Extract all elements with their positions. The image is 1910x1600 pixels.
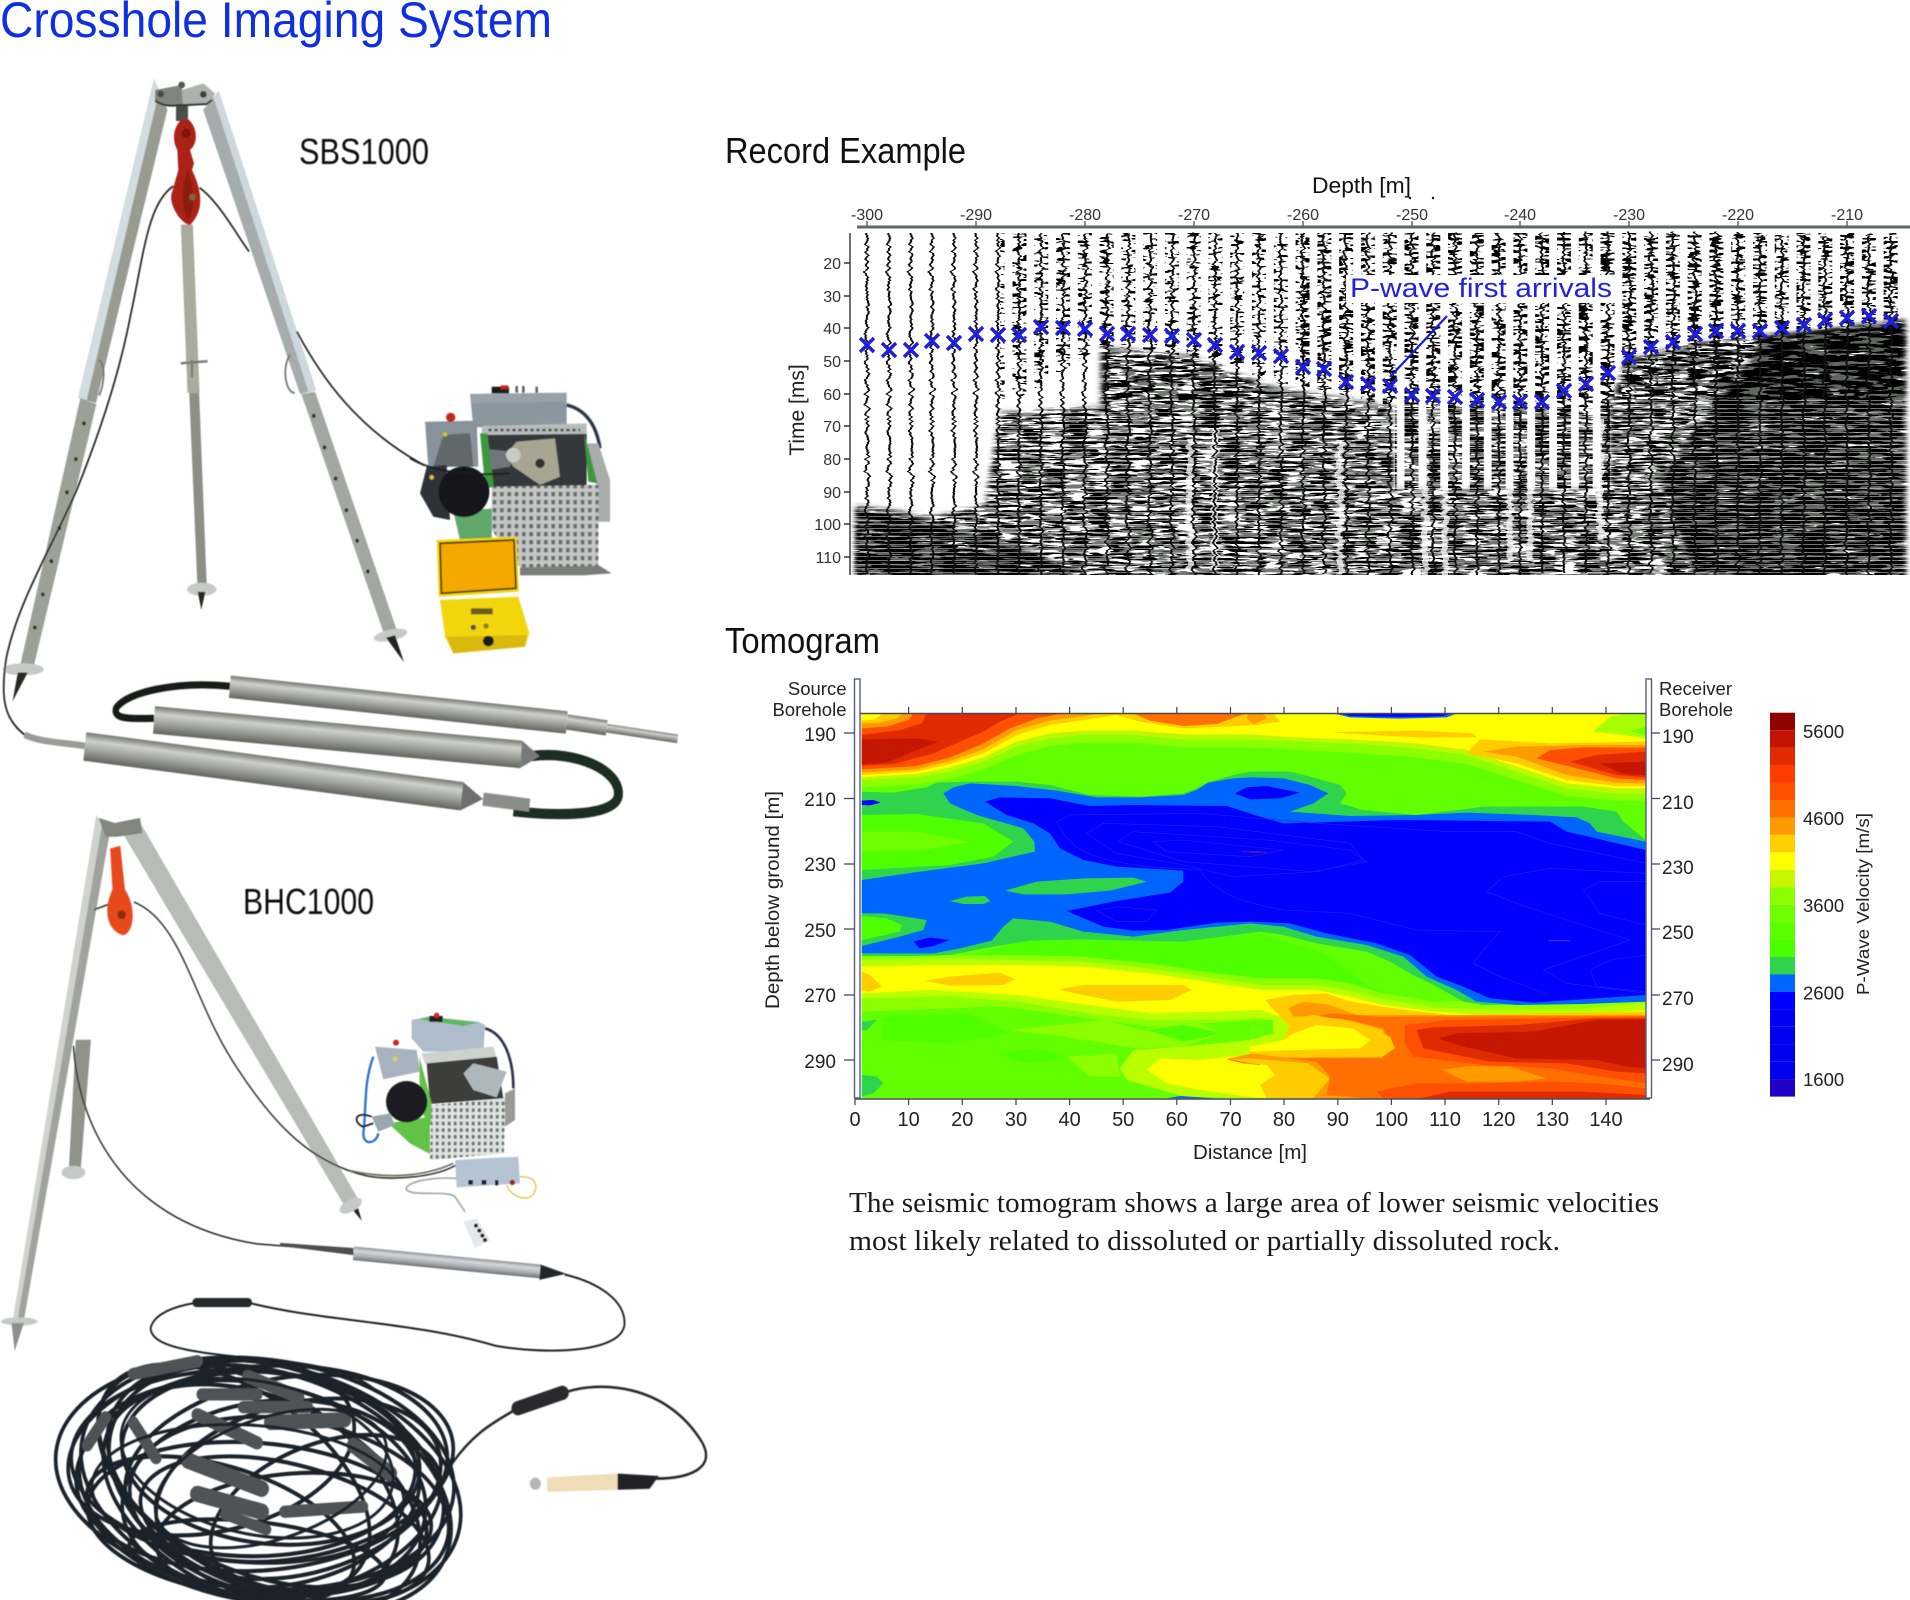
- chart: tomogram: [762, 678, 1873, 1164]
- right depth labels: 190: [1662, 727, 1694, 748]
- label: receiver borehole: Borehole: [1659, 699, 1733, 720]
- contour field: [862, 713, 1646, 1098]
- distance labels: 10: [897, 1109, 920, 1131]
- colour legend: [1770, 713, 1795, 1097]
- heading: Tomogram: Tomogram: [725, 620, 880, 661]
- time labels: 60: [823, 387, 841, 404]
- label: receiver borehole: [1659, 678, 1733, 720]
- legend values: 5600: [1803, 721, 1844, 742]
- lower warm layers: [862, 934, 1386, 994]
- chart: seismic record section: [786, 173, 1910, 575]
- label: BHC1000: BHC1000: [243, 881, 374, 922]
- distance labels: 80: [1273, 1109, 1295, 1131]
- distance labels: 130: [1536, 1109, 1569, 1131]
- distance labels: 0: [849, 1109, 861, 1131]
- right depth labels: 230: [1662, 858, 1694, 879]
- icon: SBS1000 winch: [410, 385, 612, 653]
- right depth labels: 210: [1662, 793, 1694, 814]
- time labels: 50: [823, 354, 841, 371]
- noise: dense wedges: [851, 318, 1910, 575]
- depth labels: -290: [960, 207, 992, 224]
- panel: SBS1000 equipment: [3, 79, 678, 819]
- depth labels: -210: [1831, 207, 1863, 224]
- heading: Record Example: Record Example: [725, 130, 966, 171]
- depth labels: -220: [1722, 207, 1754, 224]
- lower right hot layers: [1227, 993, 1646, 1098]
- top axis: [857, 221, 1910, 227]
- label: source borehole: Borehole: [772, 699, 846, 720]
- blue layer: [862, 777, 1646, 1005]
- plot frame and boreholes: [844, 679, 1660, 1105]
- icon: borehole source tubes: [25, 676, 678, 819]
- legend values: 1600: [1803, 1069, 1844, 1090]
- callout: P-wave first arrivals: [1346, 273, 1616, 377]
- depth labels: -230: [1613, 207, 1645, 224]
- time labels: 70: [823, 419, 841, 436]
- left depth labels: 190: [804, 725, 836, 746]
- panel: BHC1000 equipment: [1, 815, 706, 1600]
- white gaps between traces: [1190, 410, 1600, 575]
- low velocity edge layer: [862, 772, 1646, 1005]
- icon: cable coil: [47, 1316, 482, 1600]
- left depth labels: 210: [804, 790, 836, 811]
- distance labels: 110: [1429, 1109, 1461, 1131]
- right depth labels: 270: [1662, 989, 1694, 1010]
- icon: borehole hydrophone chain: [47, 1243, 706, 1600]
- distance labels: 70: [1219, 1109, 1242, 1131]
- time labels: 20: [823, 256, 841, 273]
- icon: tripod head and red pulley: [155, 82, 215, 225]
- depth axis title: Depth below ground [m]: [762, 791, 784, 1009]
- left axis: [844, 233, 850, 575]
- distance labels: 50: [1112, 1109, 1134, 1131]
- left depth labels: 270: [804, 986, 836, 1007]
- label: SBS1000: SBS1000: [299, 131, 429, 172]
- legend title: P-Wave Velocity [m/s]: [1853, 813, 1873, 995]
- right depth labels: 250: [1662, 923, 1694, 944]
- lime lens left: [862, 814, 1013, 870]
- time labels: 30: [823, 289, 841, 306]
- traces: top right blobs: [1300, 233, 1898, 407]
- top hot layers: [862, 735, 1646, 802]
- caption text: [849, 1187, 1659, 1257]
- caption text: The seismic tomogram shows a large area of lower seismic velocities: [849, 1187, 1659, 1219]
- islands: [1235, 786, 1300, 799]
- distance labels: 120: [1482, 1109, 1515, 1131]
- legend values: [1803, 721, 1844, 1090]
- depth labels: [851, 207, 1863, 224]
- distance labels: 30: [1005, 1109, 1027, 1131]
- label: source borehole: [772, 678, 846, 720]
- left depth labels: 230: [804, 855, 836, 876]
- depth labels: -300: [851, 207, 883, 224]
- seismic traces: [867, 233, 1891, 575]
- dark blue core: [985, 797, 1646, 1003]
- noise: medium density arrivals: [851, 318, 1910, 575]
- time labels: 100: [814, 517, 841, 534]
- traces: faint blobs left: [1000, 233, 1300, 410]
- legend values: 4600: [1803, 808, 1844, 829]
- traces: sparse lower middle: [1395, 407, 1610, 490]
- distance labels: [849, 1109, 1623, 1131]
- callout: P-wave first arrivals: P-wave first arrivals: [1350, 273, 1612, 303]
- distance axis title: Distance [m]: [1193, 1142, 1307, 1164]
- depth labels: -250: [1396, 207, 1428, 224]
- legend values: 3600: [1803, 895, 1844, 916]
- left depth labels: 290: [804, 1052, 836, 1073]
- label: source borehole: Source: [788, 678, 846, 699]
- contour lines: [1057, 813, 1646, 995]
- depth labels: -270: [1178, 207, 1210, 224]
- distance labels: 20: [951, 1109, 973, 1131]
- depth labels: -260: [1287, 207, 1319, 224]
- depth axis title: Depth [m]: [1312, 173, 1411, 198]
- depth labels: -280: [1069, 207, 1101, 224]
- time labels: 40: [823, 321, 841, 338]
- icon: SBS1000 tripod: [3, 79, 424, 735]
- right depth labels: 290: [1662, 1055, 1694, 1076]
- time labels: 80: [823, 452, 841, 469]
- distance labels: 60: [1166, 1109, 1188, 1131]
- distance labels: 140: [1589, 1109, 1623, 1131]
- legend values: 2600: [1803, 982, 1844, 1004]
- time labels: 110: [815, 550, 841, 567]
- caption text: most likely related to dissoluted or partially dissoluted rock.: [849, 1225, 1560, 1257]
- distance labels: 90: [1327, 1109, 1349, 1131]
- first arrival markers: [860, 309, 1898, 409]
- distance labels: 100: [1375, 1109, 1408, 1131]
- icon: BHC1000 winch: [350, 1013, 536, 1248]
- horizontal striations: [850, 400, 1910, 575]
- left depth labels: 250: [804, 921, 836, 942]
- right depth labels: [1662, 727, 1694, 1076]
- time axis title: Time [ms]: [786, 364, 809, 456]
- distance labels: 40: [1058, 1109, 1081, 1131]
- label: receiver borehole: Receiver: [1659, 678, 1732, 699]
- left depth labels: [804, 725, 836, 1073]
- depth labels: -240: [1504, 207, 1536, 224]
- icon: hydrophone tail: [452, 1387, 706, 1492]
- time labels: 90: [823, 485, 841, 502]
- icon: BHC1000 tripod: [1, 815, 459, 1351]
- time labels: [814, 256, 841, 567]
